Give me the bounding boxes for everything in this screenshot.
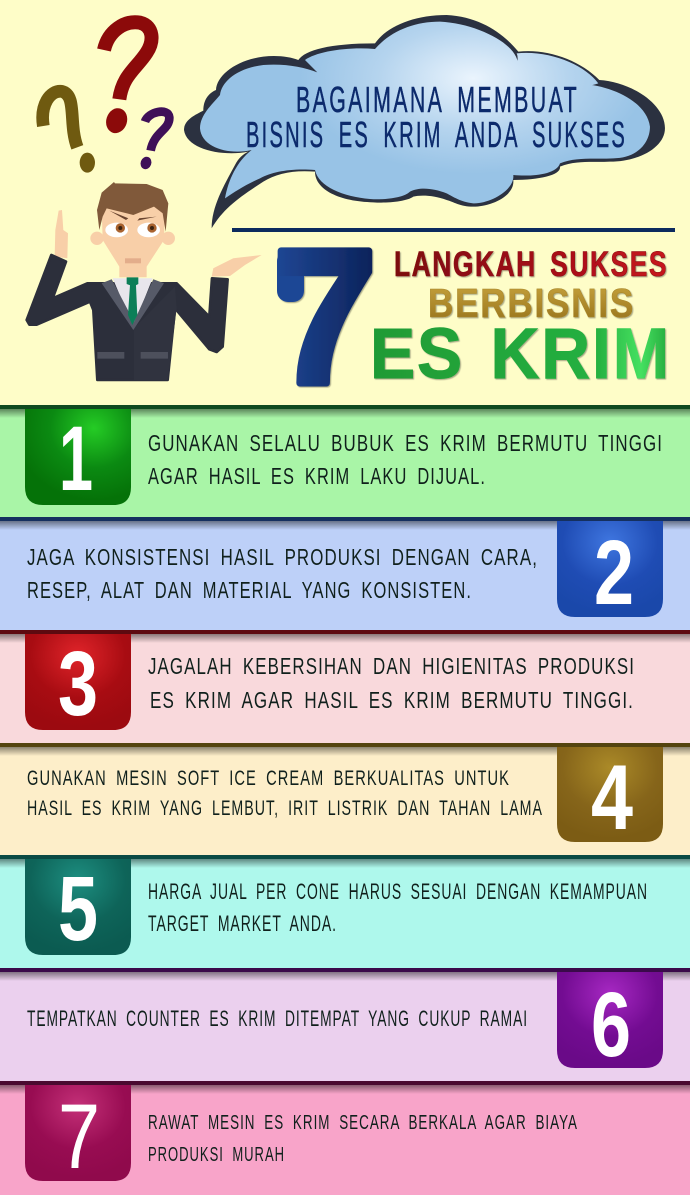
speech cloud	[184, 15, 665, 228]
text step 1: AGAR HASIL ES KRIM LAKU DIJUAL.	[148, 463, 486, 489]
eyebrows	[109, 211, 157, 221]
badge 6	[557, 972, 663, 1068]
text step 5: TARGET MARKET ANDA.	[148, 911, 337, 936]
number 7: 7	[58, 1086, 100, 1188]
badge 3	[25, 634, 131, 730]
text step 7	[148, 1112, 578, 1166]
number 6: 6	[591, 974, 631, 1076]
badge 1	[25, 409, 131, 505]
text step 5	[148, 879, 648, 936]
icon: question marks	[43, 22, 169, 173]
badge 5	[25, 859, 131, 955]
big number 7: 7	[273, 209, 377, 424]
jacket shading	[134, 287, 177, 380]
jacket and arms	[27, 255, 228, 380]
panel: step 4	[0, 743, 690, 856]
panel: step 2	[0, 517, 690, 631]
badge 2	[557, 521, 663, 617]
badge 4	[557, 747, 663, 842]
pockets	[97, 352, 168, 359]
cloud title	[246, 79, 627, 155]
badge 7	[25, 1085, 131, 1181]
cloud outline	[184, 15, 665, 228]
eyes	[105, 223, 128, 237]
lapels	[102, 279, 164, 330]
number 3: 3	[58, 633, 98, 735]
text step 2: RESEP, ALAT DAN MATERIAL YANG KONSISTEN.	[27, 577, 472, 603]
left hand pointing	[55, 210, 68, 258]
hair	[97, 182, 168, 232]
shirt	[113, 278, 153, 327]
cloud fill	[200, 22, 650, 203]
icon: businessman shrugging	[27, 182, 262, 380]
heading: es krim: ES KRIM	[370, 315, 671, 394]
number 1: 1	[59, 408, 93, 510]
face	[102, 207, 165, 277]
number 4: 4	[591, 747, 633, 849]
text step 4	[27, 767, 543, 820]
panel: step 5	[0, 855, 690, 969]
right hand open	[212, 255, 262, 277]
heading: berbisnis: BERBISNIS	[428, 280, 635, 326]
tie	[127, 277, 138, 325]
text step 7: PRODUKSI MURAH	[148, 1144, 285, 1166]
text step 3	[148, 653, 635, 713]
text step 1	[148, 430, 663, 489]
divider line	[232, 228, 675, 232]
panel: step 3	[0, 630, 690, 744]
panel: step 6	[0, 968, 690, 1082]
number 2: 2	[594, 522, 634, 624]
panel: step 7	[0, 1081, 690, 1195]
panel: step 1	[0, 405, 690, 518]
text step 2	[27, 544, 538, 603]
ears	[90, 232, 104, 245]
number 5: 5	[58, 858, 98, 960]
mouth	[125, 258, 141, 263]
